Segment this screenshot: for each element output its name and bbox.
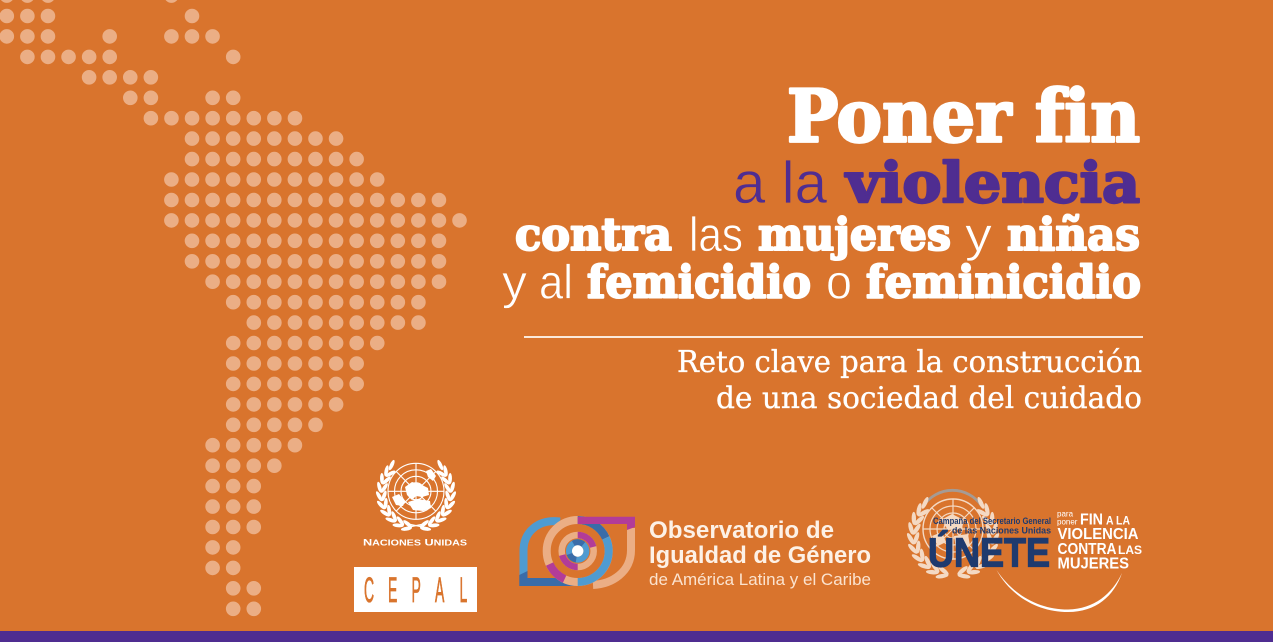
- heading line: contra las mujeres y niñas: niñas: [1007, 208, 1140, 261]
- logo: CEPAL: [354, 567, 477, 612]
- icon: UN wreath: [375, 459, 457, 531]
- logo: CEPAL: C: [364, 570, 374, 610]
- logo: CEPAL: L: [460, 570, 467, 610]
- icon: faded UN wreath: [906, 496, 1000, 579]
- campaign slogan: FIN: [1080, 512, 1103, 528]
- heading line: contra las mujeres y niñas: y: [965, 209, 992, 262]
- heading line: contra las mujeres y niñas: [515, 208, 1140, 262]
- heading line: y al femicidio o feminicidio: feminicidio: [866, 256, 1141, 308]
- campaign slogan: MUJERES: [1058, 556, 1129, 572]
- heading line: y al femicidio o feminicidio: al: [539, 256, 573, 310]
- logo wordmark: [649, 517, 871, 589]
- campaign slogan: poner: [1057, 518, 1078, 526]
- heading line: a la violencia: a la: [733, 150, 827, 216]
- campaign slogan: LAS: [1118, 543, 1142, 557]
- campaign slogan: para: [1057, 510, 1074, 518]
- logo: CEPAL: P: [412, 570, 421, 610]
- subtitle: Reto clave para la construcción: [677, 345, 1142, 380]
- campaign name: de las Naciones Unidas: [952, 526, 1051, 536]
- campaign slogan: VIOLENCIA: [1058, 526, 1139, 543]
- heading line: contra las mujeres y niñas: las: [689, 209, 743, 262]
- bottom purple band: [0, 631, 1273, 642]
- icon: faded UN emblem: [923, 490, 983, 559]
- heading line: Poner fin: Poner fin: [787, 74, 1140, 158]
- icon: UN globe: [388, 463, 444, 520]
- campaign name: ÚNETE: [928, 530, 1050, 576]
- heading line: contra las mujeres y niñas: mujeres: [758, 208, 951, 261]
- label: Naciones Unidas: N ACIONES U NIDAS: [363, 538, 468, 548]
- campaign slogan: A LA: [1106, 514, 1130, 528]
- logo: Observatorio de Igualdad de Género: [519, 517, 871, 589]
- heading line: y al femicidio o feminicidio: y: [502, 256, 527, 310]
- logo: ÚNETE campaign: [906, 490, 1142, 612]
- title: [502, 74, 1141, 310]
- heading line: y al femicidio o feminicidio: o: [826, 256, 852, 310]
- heading line: a la violencia: [733, 150, 1140, 216]
- logo: CEPAL: E: [388, 570, 397, 610]
- logo: CEPAL: A: [435, 570, 444, 610]
- icon: concentric eye mark: [519, 517, 635, 586]
- logo: Naciones Unidas emblem: [363, 459, 468, 548]
- campaign slogan: [1057, 510, 1142, 572]
- dotted map of Latin America: [7, 0, 460, 609]
- icon: white crescent: [996, 570, 1122, 612]
- logo wordmark: Igualdad de Género: [649, 542, 871, 569]
- logo wordmark: de América Latina y el Caribe: [649, 570, 871, 589]
- subtitle: de una sociedad del cuidado: [716, 381, 1142, 416]
- subtitle: [677, 345, 1142, 416]
- heading line: y al femicidio o feminicidio: femicidio: [587, 256, 811, 308]
- heading line: contra las mujeres y niñas: contra: [515, 208, 672, 261]
- campaign slogan: CONTRA: [1058, 541, 1117, 558]
- heading line: y al femicidio o feminicidio: [502, 256, 1141, 310]
- heading line: a la violencia: violencia: [845, 150, 1140, 215]
- campaign name: Campaña del Secretario General: [933, 516, 1051, 527]
- logo wordmark: Observatorio de: [649, 517, 834, 544]
